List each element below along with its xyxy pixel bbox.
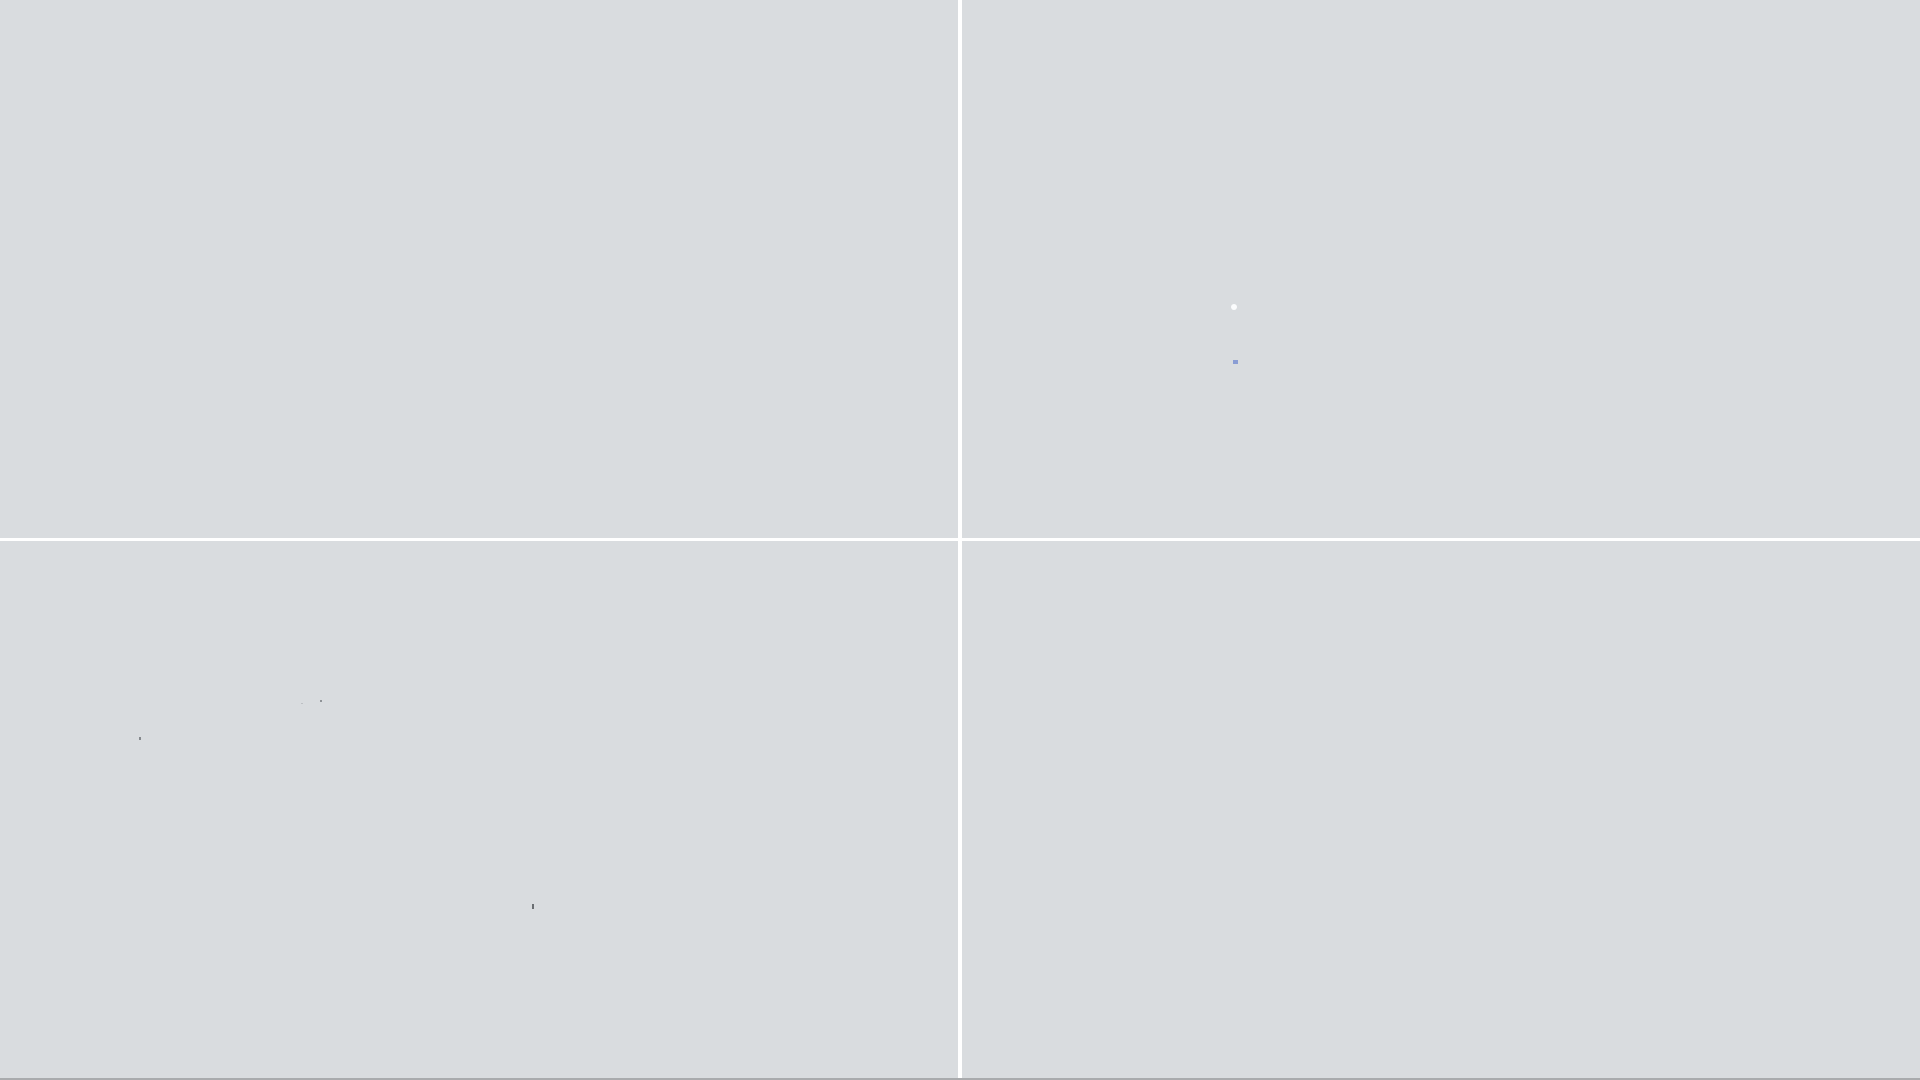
- marker: faint speck: [301, 703, 303, 704]
- panel: top left: [0, 0, 958, 538]
- marker: blue dot: [1233, 360, 1238, 364]
- marker: lower speck: [532, 904, 534, 909]
- bottom edge line: [0, 1078, 1920, 1080]
- marker: speck at left: [139, 737, 141, 740]
- panel: bottom right: [962, 541, 1920, 1078]
- marker: white dot: [1231, 304, 1237, 310]
- marker: upper speck: [320, 700, 322, 702]
- horizontal divider: [0, 538, 1920, 541]
- panel: bottom left: [0, 541, 958, 1078]
- vertical divider: [958, 0, 962, 1078]
- panel: top right: [962, 0, 1920, 538]
